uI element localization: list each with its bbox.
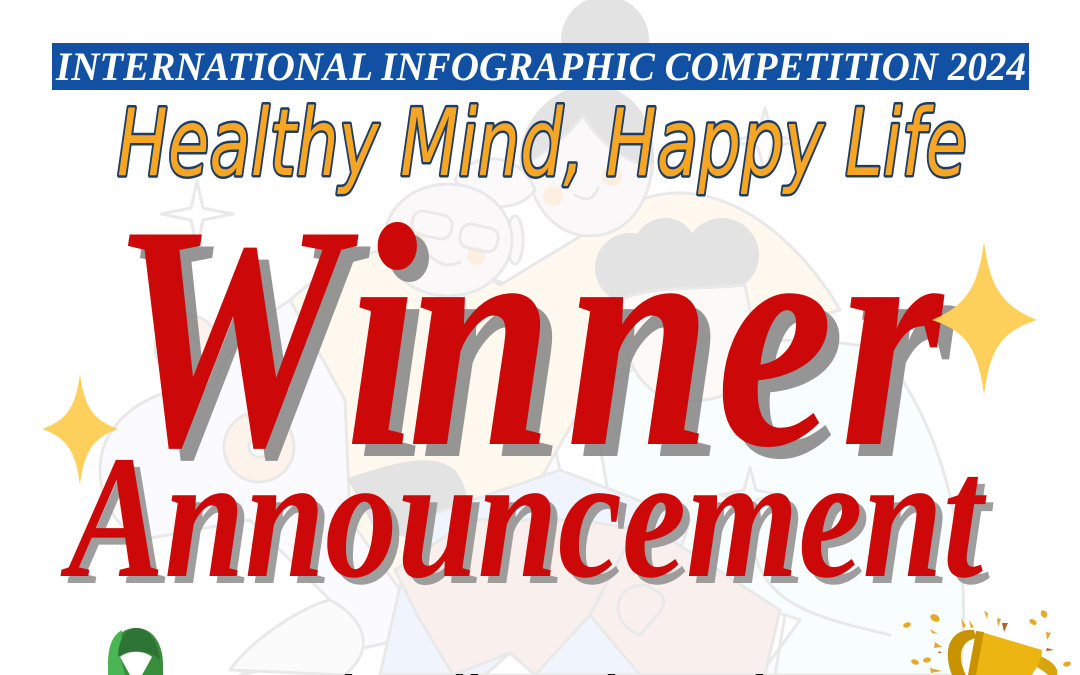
banner text: INTERNATIONAL INFOGRAPHIC COMPETITION 2024 (55, 44, 1026, 89)
icon: green awareness ribbon (108, 628, 163, 675)
figure: right body (590, 340, 963, 675)
banner (52, 43, 1029, 90)
figure: beige body back (290, 193, 840, 620)
icon: small gold sparkle (42, 374, 118, 485)
heading: Winner: Winner (110, 160, 947, 514)
heading: Winner: Winner (122, 172, 959, 526)
figure: child hair (595, 218, 759, 305)
icon: gold trophy (902, 609, 1072, 675)
figure: grandfather hair (455, 159, 535, 206)
confetti (902, 609, 1072, 673)
icon: large gold sparkle (932, 242, 1037, 395)
figure: lower-left grey hair (347, 460, 467, 545)
figure: child face (620, 285, 760, 401)
figure: shirts and arms (380, 470, 690, 675)
figure: woman hair (561, 0, 649, 84)
background illustration: faint family (100, 0, 963, 675)
figure: woman face (527, 115, 652, 236)
figure: grandfather face (507, 216, 523, 264)
flowers (155, 315, 219, 379)
figure: left person body (100, 261, 560, 675)
outline sparkles (161, 181, 233, 248)
